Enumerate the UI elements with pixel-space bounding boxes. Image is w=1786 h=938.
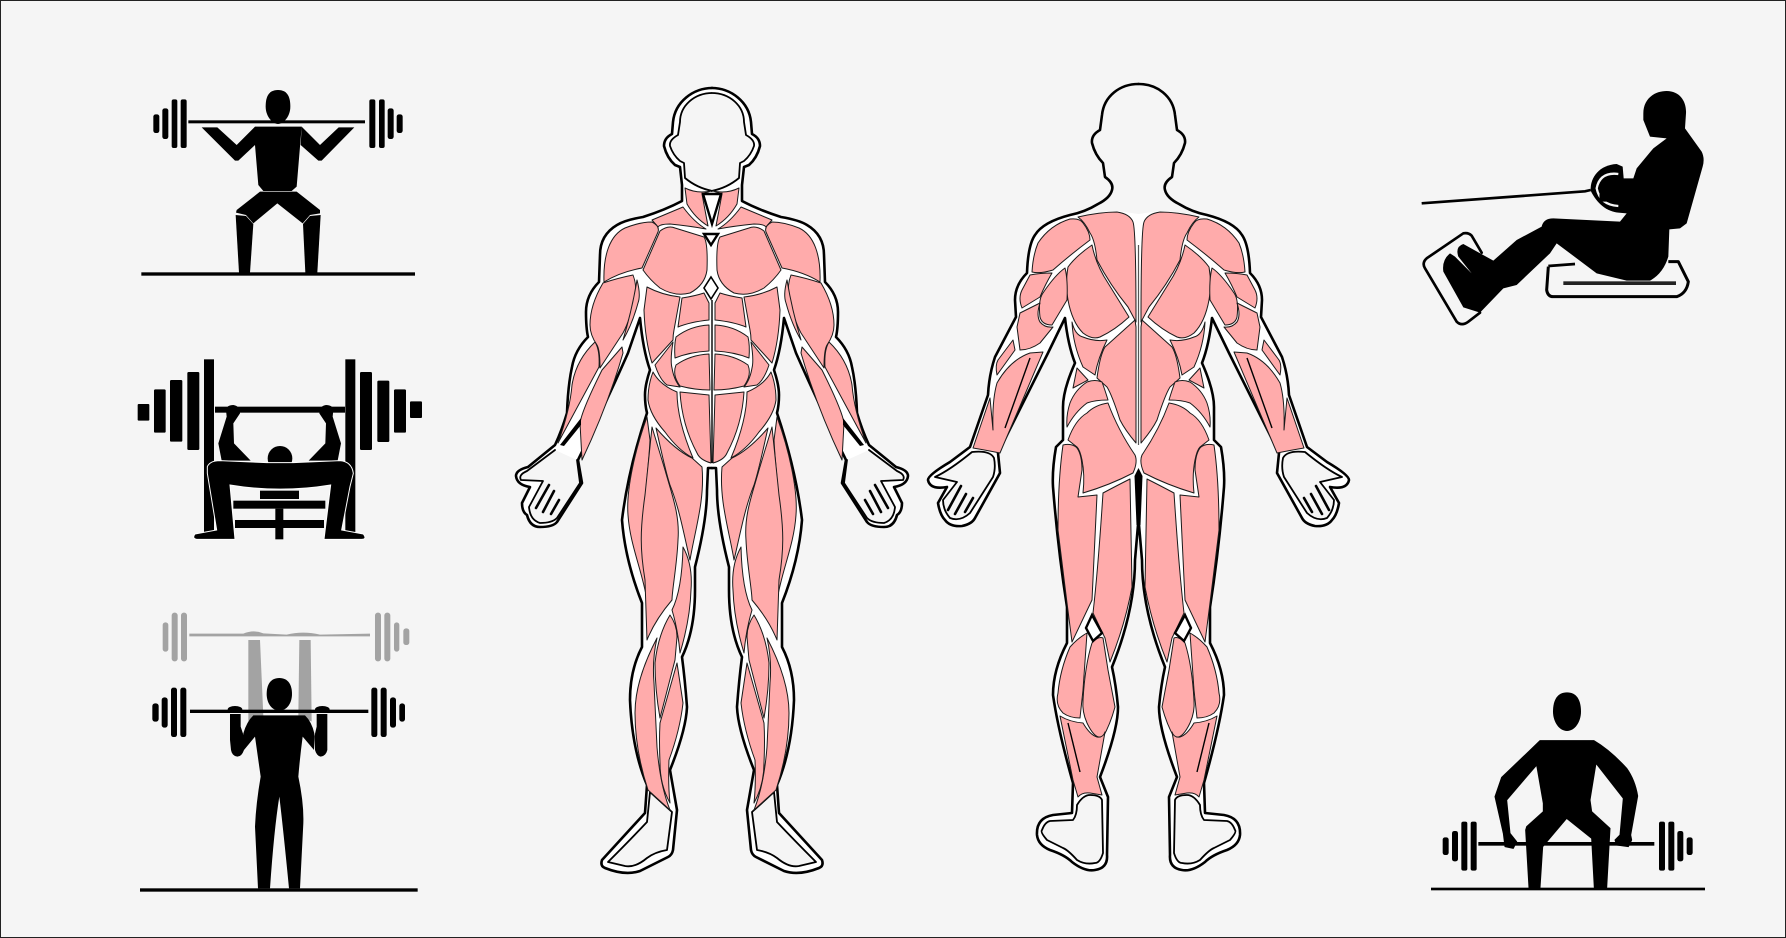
back figure: right half [1138,84,1349,870]
cable handle [1591,164,1627,213]
back figure: left half [928,84,1138,870]
front figure: left half [516,88,712,873]
sternum triangle [704,234,718,245]
seat [1547,262,1688,297]
front figure: right half [712,88,908,873]
throat triangle [703,194,721,224]
icon: deadlift [1431,692,1705,890]
icon: barbell back squat [141,90,415,276]
icon: bench press [138,359,422,539]
lifter and barbell [140,678,418,892]
sternum diamond [704,277,718,299]
icon: seated cable row [1422,91,1704,324]
icon: overhead press [140,613,418,892]
cable [1422,190,1591,203]
rower silhouette [1443,91,1704,313]
spine line [1138,245,1140,445]
linea alba [711,300,713,463]
foot plate [1424,233,1482,324]
inner thigh slit [1134,468,1142,525]
ghost barbell raised position [163,613,409,722]
front view muscle figure [516,88,908,873]
back view muscle figure [928,84,1349,870]
